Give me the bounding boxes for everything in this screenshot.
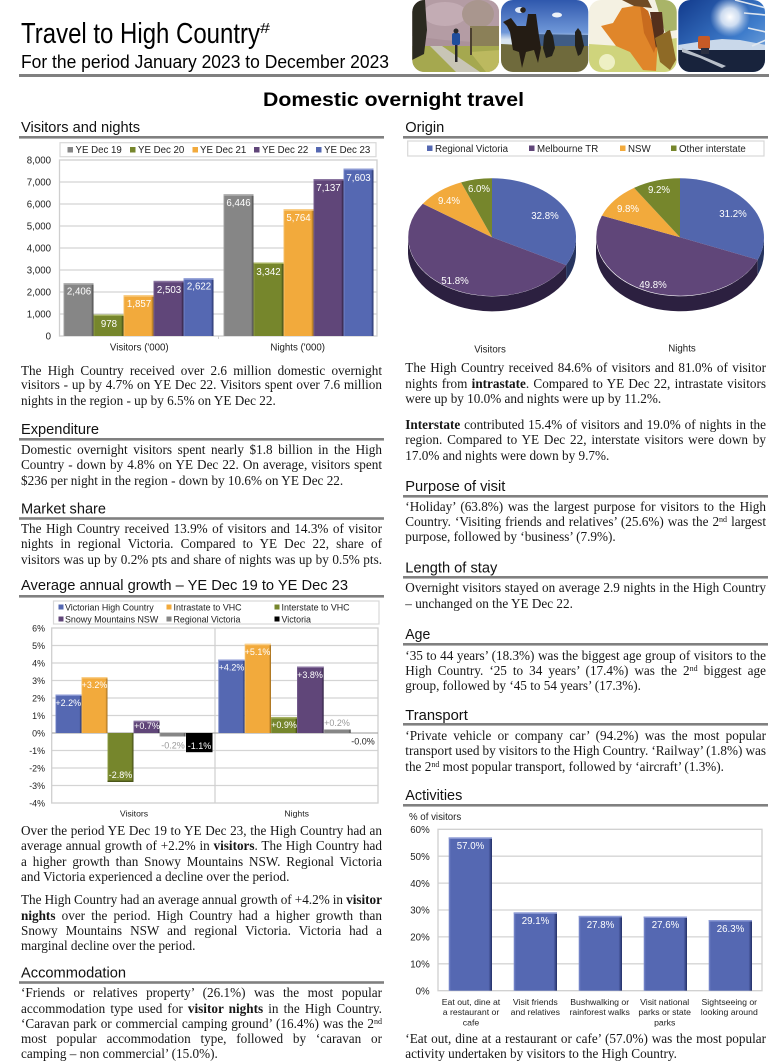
heading: age: Age xyxy=(405,627,430,643)
text: market share: The High Country received 13.9% of visitors and 14.3% of visitor xyxy=(21,521,382,536)
text: purpose of visit: Country. ‘Visiting friends and relatives’ (25.6%) was the 2nd largest xyxy=(405,514,766,529)
header rule xyxy=(19,74,769,77)
pie: visitors: Visitors xyxy=(474,344,506,356)
pie: nights: 9.8% xyxy=(617,204,639,215)
text: purpose of visit: purpose, followed by ‘business’ (7.9%). xyxy=(405,529,616,544)
value labels: +0.2% xyxy=(324,718,350,728)
text: activities: activity undertaken by visitors to the High Country. xyxy=(405,1046,677,1061)
text: growth in visitor nights xyxy=(21,892,382,953)
legend: growth series: Victorian High Country xyxy=(65,602,154,612)
bar chart: visitors and nights xyxy=(27,143,377,354)
text: visitors and nights summary: The High Country received over 2.6 million domestic overnight xyxy=(21,363,382,378)
legend: growth series xyxy=(54,601,379,624)
text: expenditure xyxy=(21,442,382,488)
main heading: Domestic overnight travel xyxy=(263,89,524,111)
text: length of stay: Overnight visitors stayed on average 2.9 nights in the High Country xyxy=(405,580,766,594)
legend: growth series: Interstate to VHC xyxy=(282,602,350,612)
text: visitors and nights summary: visitors - up by 4.7% on YE Dec 22. Visitors spent over 7.6 million xyxy=(21,377,382,392)
pie: visitors: 6.0% xyxy=(468,184,490,195)
y axis labels: -4% xyxy=(29,798,45,808)
category labels: and relatives xyxy=(511,1007,561,1017)
pie: nights: 49.8% xyxy=(639,280,667,291)
value labels: +4.2% xyxy=(219,662,244,672)
pie charts: origin xyxy=(408,141,764,356)
pie: nights xyxy=(596,178,764,354)
y axis labels: 7,000 xyxy=(27,178,52,188)
text: age: group, followed by ‘45 to 54 years’ (17.3%). xyxy=(405,678,641,693)
text: expenditure: $236 per night in the region - down by 10.6% on YE Dec 22. xyxy=(21,473,343,488)
text: age: High Country. ‘25 to 34 years’ (17.4%) was the 2nd biggest age xyxy=(405,662,766,678)
value labels: +3.8% xyxy=(297,670,323,680)
y axis labels: -1% xyxy=(29,746,45,756)
subtitle: For the period January 2023 to December 2023 xyxy=(21,51,389,72)
y axis labels: 4% xyxy=(32,658,45,668)
value labels: +3.2% xyxy=(82,680,107,690)
category labels: a restaurant or xyxy=(443,1007,499,1017)
text: visitors and nights summary xyxy=(21,363,382,408)
category labels: Nights ('000) xyxy=(270,343,325,354)
value labels: -1.1% xyxy=(188,741,211,751)
category labels: rainforest walks xyxy=(570,1007,631,1017)
value labels xyxy=(457,841,745,935)
text: accommodation: ‘Friends or relatives property’ (26.1%) was the most popular xyxy=(21,985,382,1000)
value labels: 27.6% xyxy=(652,920,680,931)
y axis labels: 5,000 xyxy=(27,222,52,232)
y axis labels: 2,000 xyxy=(27,288,52,298)
text: age: ‘35 to 44 years’ (18.3%) was the biggest age group of visitors to the xyxy=(405,648,766,662)
y axis labels xyxy=(410,825,430,997)
heading: market share: Market share xyxy=(21,502,106,518)
legend: year series: YE Dec 20 xyxy=(138,145,185,156)
text: growth in visitors: Over the period YE Dec 19 to YE Dec 23, the High Country had an xyxy=(21,823,382,838)
category labels: Visit national xyxy=(640,997,689,1007)
y axis labels: 2% xyxy=(32,694,45,704)
text: accommodation xyxy=(21,985,382,1061)
category labels: parks xyxy=(654,1017,676,1027)
text: growth in visitor nights: marginal decline over the period. xyxy=(21,938,195,953)
text: market share xyxy=(21,521,382,567)
value labels: +0.9% xyxy=(271,720,297,730)
category labels: Visit friends xyxy=(513,997,558,1007)
text: length of stay: – unchanged on the YE Dec 22. xyxy=(405,596,573,611)
legend: year series: YE Dec 19 xyxy=(76,145,122,156)
title: Travel to High Country xyxy=(21,18,260,50)
category labels xyxy=(442,997,758,1027)
y axis labels: 8,000 xyxy=(27,156,52,166)
bars: visitors xyxy=(64,278,214,336)
y axis labels xyxy=(29,624,45,808)
bars xyxy=(449,837,752,991)
bar chart: activities xyxy=(409,812,762,1027)
legend: origin xyxy=(408,141,764,156)
text: transport: the 2nd most popular transport, followed by ‘aircraft’ (1.3%). xyxy=(405,758,724,774)
y axis labels: 0% xyxy=(32,728,45,738)
pie: visitors: 32.8% xyxy=(531,211,559,222)
category labels: Sightseeing or xyxy=(702,997,757,1007)
value labels xyxy=(67,173,371,330)
bars: nights xyxy=(224,169,374,336)
value labels: 978 xyxy=(101,319,117,330)
heading: average annual growth: Average annual growth – YE Dec 19 to YE Dec 23 xyxy=(21,578,348,594)
legend: growth series: Victoria xyxy=(282,614,311,624)
category labels xyxy=(110,343,325,354)
heading: activities: Activities xyxy=(405,788,462,804)
value labels: +5.1% xyxy=(245,647,270,657)
heading: length of stay: Length of stay xyxy=(405,561,498,577)
value labels: -0.0% xyxy=(351,736,375,746)
heading: visitors and nights: Visitors and nights xyxy=(21,120,140,136)
value labels xyxy=(55,647,375,780)
text: origin interstate xyxy=(405,417,766,463)
value labels: +2.2% xyxy=(55,698,81,708)
legend: year series: YE Dec 21 xyxy=(200,145,246,156)
bar chart: activities: % of visitors xyxy=(409,812,461,823)
legend: origin: Melbourne TR xyxy=(537,144,598,155)
text: accommodation: accommodation type used for visitor nights in the High Country. xyxy=(21,1001,382,1016)
title: # xyxy=(260,20,271,37)
value labels: 57.0% xyxy=(457,841,485,852)
pie: visitors: 51.8% xyxy=(441,276,469,287)
text: activities: ‘Eat out, dine at a restaurant or cafe’ (57.0%) was the most popular xyxy=(405,1031,766,1046)
y axis labels: -3% xyxy=(29,781,45,791)
text: market share: nights in regional Victoria. Compared to YE Dec 22, share of xyxy=(21,536,382,551)
text: origin intrastate: were up by 10.0% and nights were up by 11.2%. xyxy=(405,391,661,406)
photo: horse riders xyxy=(501,0,589,72)
legend: growth series: Regional Victoria xyxy=(174,614,240,624)
value labels: +0.7% xyxy=(134,721,160,731)
text: origin interstate: Interstate contributed 15.4% of visitors and 19.0% of nights in the xyxy=(405,417,766,432)
legend: growth series: Snowy Mountains NSW xyxy=(65,614,159,624)
y axis labels: 60% xyxy=(410,825,430,836)
photo: skier on snowy ridge xyxy=(678,0,766,72)
text: growth in visitor nights: nights over the period. High Country had a higher growth than xyxy=(21,908,382,923)
text: transport xyxy=(405,728,766,774)
text: visitors and nights summary: nights in the region - up by 6.5% on YE Dec 22. xyxy=(21,393,276,408)
value labels: 2,503 xyxy=(157,285,181,296)
text: purpose of visit xyxy=(405,499,766,544)
text: growth in visitors: a higher growth than Snowy Mountains NSW. Regional Victoria xyxy=(21,854,382,869)
bar chart: average annual growth xyxy=(29,601,379,819)
value labels: 3,342 xyxy=(256,267,281,278)
text: length of stay xyxy=(405,580,766,611)
photo: cyclist on tree-lined path xyxy=(412,0,500,72)
text: growth in visitor nights: The High Country had an average annual growth of +4.2% in visitor xyxy=(21,892,382,907)
bars: visitors growth xyxy=(56,677,212,782)
value labels: 1,857 xyxy=(127,299,151,310)
heading: expenditure: Expenditure xyxy=(21,422,99,438)
y axis labels: 1,000 xyxy=(27,310,52,320)
category labels: cafe xyxy=(463,1017,479,1027)
category labels: Eat out, dine at xyxy=(442,997,501,1007)
text: origin interstate: 17.0% and nights were down by 9.7%. xyxy=(405,448,609,463)
text: origin intrastate: The High Country received 84.6% of visitors and 81.0% of visitor xyxy=(405,360,766,375)
y axis labels: 4,000 xyxy=(27,244,52,254)
legend: origin: NSW xyxy=(628,144,651,155)
y axis labels: 3% xyxy=(32,676,45,686)
y axis labels: 3,000 xyxy=(27,266,52,276)
y axis labels: 5% xyxy=(32,641,45,651)
text: growth in visitor nights: Snowy Mountains NSW and regional Victoria. Victoria had a xyxy=(21,923,382,938)
photo: autumn leaf xyxy=(589,0,677,72)
text: origin interstate: region. Compared to YE Dec 22, interstate visitors were down by xyxy=(405,432,766,447)
text: expenditure: Country - down by 4.8% on YE Dec 22. On average, visitors spent xyxy=(21,457,382,472)
value labels: 7,137 xyxy=(316,183,341,194)
value labels: 7,603 xyxy=(346,173,371,184)
value labels: -0.2% xyxy=(161,740,185,750)
text: activities xyxy=(405,1031,766,1061)
value labels: 5,764 xyxy=(286,213,311,224)
y axis labels: 6,000 xyxy=(27,200,52,210)
category labels: parks or state xyxy=(638,1007,691,1017)
text: growth in visitors xyxy=(21,823,382,884)
bars: nights growth xyxy=(218,644,351,733)
legend: year series: YE Dec 23 xyxy=(324,145,370,156)
text: accommodation: most popular accommodation type, followed by ‘caravan or xyxy=(21,1031,382,1046)
value labels: 2,406 xyxy=(67,286,91,298)
text: age xyxy=(405,648,766,693)
text: purpose of visit: ‘Holiday’ (63.8%) was the largest purpose for visitors to the High xyxy=(405,499,766,514)
pie: visitors xyxy=(408,178,576,356)
text: accommodation: camping – non commercial’ (15.0%). xyxy=(21,1046,218,1061)
y axis labels: 20% xyxy=(410,933,430,944)
text: origin intrastate xyxy=(405,360,766,406)
legend: year series xyxy=(60,143,376,157)
y axis labels: -2% xyxy=(29,764,45,774)
value labels: -2.8% xyxy=(109,770,132,780)
y axis labels: 10% xyxy=(410,960,430,970)
y axis labels: 50% xyxy=(410,852,430,863)
text: market share: visitors was up by 0.2% pts and share of nights was up by 0.5% pts. xyxy=(21,552,382,567)
legend: year series: YE Dec 22 xyxy=(262,145,308,156)
y axis labels: 0 xyxy=(46,332,52,342)
text: growth in visitors: average annual growth of +2.2% in visitors. The High Country had xyxy=(21,838,382,853)
pie: visitors: 9.4% xyxy=(438,196,460,207)
text: origin intrastate: nights from intrastate. Compared to YE Dec 22, intrastate visitors xyxy=(405,376,766,391)
category labels: looking around xyxy=(701,1007,758,1017)
heading: accommodation: Accommodation xyxy=(21,966,126,982)
heading: transport: Transport xyxy=(405,708,468,724)
category labels: Visitors ('000) xyxy=(110,343,169,354)
category labels: Visitors xyxy=(120,809,149,819)
value labels: 6,446 xyxy=(226,198,251,209)
pie: nights: 31.2% xyxy=(719,209,747,220)
y axis labels: 30% xyxy=(410,906,430,917)
text: accommodation: ‘Caravan park or commercial camping ground’ (16.4%) was the 2nd xyxy=(21,1016,382,1031)
category labels: Bushwalking or xyxy=(570,997,629,1007)
y axis labels: 1% xyxy=(32,711,45,721)
heading: purpose of visit: Purpose of visit xyxy=(405,479,505,495)
pie: nights: Nights xyxy=(668,344,696,354)
pie: nights: 9.2% xyxy=(648,185,670,196)
y axis labels: 6% xyxy=(32,624,45,634)
y axis labels xyxy=(27,156,52,342)
category labels: Nights xyxy=(284,809,310,819)
text: transport: ‘Private vehicle or company car’ (94.2%) was the most popular xyxy=(405,728,766,742)
legend: origin: Other interstate xyxy=(679,144,746,155)
y axis labels: 0% xyxy=(416,986,430,997)
heading: origin: Origin xyxy=(405,120,444,136)
legend: growth series: Intrastate to VHC xyxy=(174,602,242,612)
value labels: 27.8% xyxy=(587,920,615,931)
text: expenditure: Domestic overnight visitors spent nearly $1.8 billion in the High xyxy=(21,442,382,457)
text: growth in visitors: and Victoria experienced a decline over the period. xyxy=(21,869,289,884)
value labels: 26.3% xyxy=(717,924,745,935)
y axis labels: 40% xyxy=(410,879,430,890)
value labels: 29.1% xyxy=(522,916,550,927)
category labels xyxy=(120,809,310,819)
legend: origin: Regional Victoria xyxy=(435,144,509,155)
text: transport: transport used by visitors to the High Country. ‘Railway’ (1.8%) was xyxy=(405,743,766,758)
value labels: 2,622 xyxy=(187,282,211,292)
